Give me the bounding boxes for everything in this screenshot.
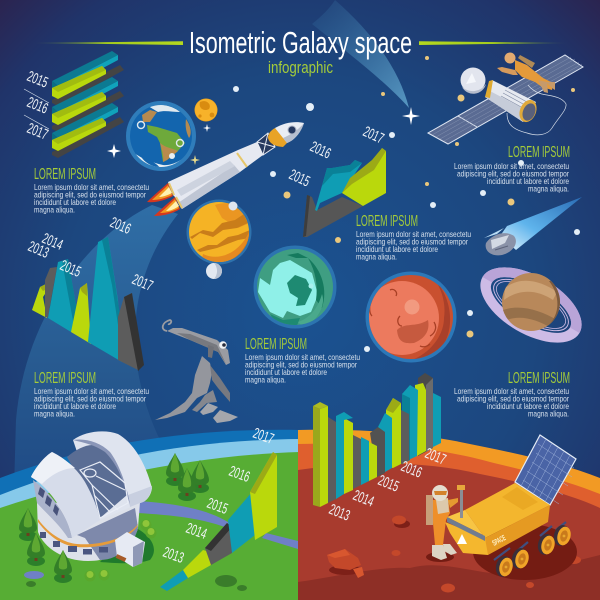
text block: top left [34,166,149,214]
body [168,142,263,209]
group three bars [52,103,124,158]
text block: centre [245,336,360,384]
icon: satellite [428,52,583,144]
bar chart on red world: 2016 [399,458,424,482]
text block: left middle: Lorem ipsum dolor sit amet, consectetu [34,387,149,396]
text block: left middle: adipiscing elit, sed do eiusmod tempor [34,394,146,404]
text block: top right: adipiscing elit, sed do eiusmod tempor [457,170,569,178]
nose cone [275,122,304,143]
group one bars [52,51,124,106]
text block: left middle: magna aliqua. [34,410,75,418]
gold band [268,128,288,147]
river [138,501,232,530]
text block: centre right: Lorem ipsum dolor sit amet, consectetu [356,230,471,239]
annex [115,532,145,567]
text block: centre: LOREM IPSUM [245,336,307,353]
icon: jupiter upper moon [228,202,238,210]
icon: earth [126,101,196,172]
green chart bottom left: 2013 [161,544,186,567]
icon: orange planet [186,200,252,270]
text block: top left: LOREM IPSUM [34,166,96,183]
green chart bottom left: 2014 [184,520,209,543]
observatory [31,431,154,567]
shooting star trail [312,0,409,108]
end cap [516,97,540,125]
text block: centre right: LOREM IPSUM [356,213,418,230]
rover [426,435,577,580]
mountain peak chart left: 2013 [25,238,51,262]
text block: centre right: incididunt ut labore et dolore [356,245,438,254]
text block: centre: adipiscing elit, sed do eiusmod tempor [245,360,357,370]
green chart bottom left: 2016 [227,463,252,486]
dome front shell [31,452,100,538]
text block: top left: adipiscing elit, sed do eiusmod tempor [34,190,146,200]
text block: centre: magna aliqua. [245,376,286,384]
text block: lower right: magna aliqua. [528,410,569,418]
dome slot interior [67,445,127,518]
text block: top right [454,144,570,194]
text block: left middle: LOREM IPSUM [34,370,96,387]
dome underside [33,480,72,538]
telescope lattice [80,462,128,518]
icon: moon [194,98,218,122]
icon: alien creature [155,320,238,423]
solar panel [515,435,576,505]
text block: lower right: adipiscing elit, sed do eiusmod tempor [457,394,569,404]
astronaut explorer [426,485,465,560]
zigzag area chart top centre: 2016 [307,138,334,163]
text block: left middle: incididunt ut labore et dolore [34,402,116,411]
bar chart on red world: 2015 [376,472,401,496]
text block: centre right: adipiscing elit, sed do eiusmod tempor [356,238,468,246]
trees on green world [19,453,209,583]
dome back shell [73,431,152,520]
bar chart on red world: 2017 [423,445,448,469]
bar chart on red world: 2013 [327,501,352,525]
stacked isometric bars chart top left: 2015 [25,68,50,92]
text block: lower right: Lorem ipsum dolor sit amet, consectetu [454,387,569,396]
sphere module [460,68,486,92]
module cylinder [485,80,536,122]
stacked isometric bars chart top left [24,51,124,158]
icon: saturn [480,267,582,343]
title rule right [419,41,570,45]
dome lip [73,440,130,505]
text block: top right: incididunt ut labore et dolore [487,177,569,186]
text block: top right: magna aliqua. [528,184,569,194]
cylinder base [37,502,140,561]
green chart bottom left: 2015 [205,495,230,518]
mountain peak chart left: 2017 [129,271,155,295]
text block: top left: Lorem ipsum dolor sit amet, consectetu [34,183,149,192]
small background dots and stars [107,56,580,352]
rover: SPACE [491,533,508,548]
rover shadow [473,524,577,580]
text block: centre right [356,213,471,262]
title rule left [30,41,183,45]
bushes [24,520,247,591]
body shading [178,165,240,209]
mountain peak chart left: 2015 [57,257,83,281]
mountain peak chart left [25,214,155,371]
ground shadow [100,526,154,563]
stacked isometric bars chart top left: 2016 [25,94,50,118]
text block: centre: Lorem ipsum dolor sit amet, consectetu [245,353,360,362]
green chart bottom left [160,425,277,591]
text block: centre: incididunt ut labore et dolore [245,368,327,377]
mountain peak chart left: 2014 [39,230,65,254]
decorative arc behind rocket [14,205,178,490]
subtitle: infographic [268,58,333,77]
green chart bottom left: 2017 [251,425,276,448]
text block: top right: Lorem ipsum dolor sit amet, consectetu [454,162,569,171]
wheel struts [494,522,566,560]
text block: top left: magna aliqua. [34,206,75,214]
text block: left middle [34,370,149,418]
astronaut shadow [426,552,454,562]
solar panels [428,55,583,144]
icon: green planet [254,246,336,328]
zigzag area chart top centre: 2015 [286,166,313,191]
zigzag area chart top centre [286,123,387,237]
title: Isometric Galaxy space [189,25,412,60]
mountain peak chart left: 2016 [107,214,133,238]
stacked isometric bars chart top left: 2017 [25,120,50,144]
rocks on red world [327,516,581,592]
group two bars [52,77,124,132]
astronaut [497,52,555,93]
tether cable [507,85,566,135]
text block: centre right: magna aliqua. [356,252,397,262]
lattice interstage [257,133,275,155]
text block: top left: incididunt ut labore et dolore [34,198,116,207]
left planet ground: green world [0,430,300,600]
chassis [465,483,550,538]
bar chart on red world [313,373,448,525]
text block: lower right: incididunt ut labore et dolore [487,402,569,411]
icon: comet [484,197,582,255]
wheels [552,523,573,547]
flames [147,183,180,216]
bar chart on red world: 2014 [351,487,376,511]
icon: jupiter lower moon [206,263,222,279]
right planet ground: red world [298,430,600,600]
zigzag area chart top centre: 2017 [360,123,387,148]
text block: lower right [454,370,570,418]
icon: mars [365,272,456,362]
icon: rocket [147,122,304,216]
dome windows [38,487,59,516]
